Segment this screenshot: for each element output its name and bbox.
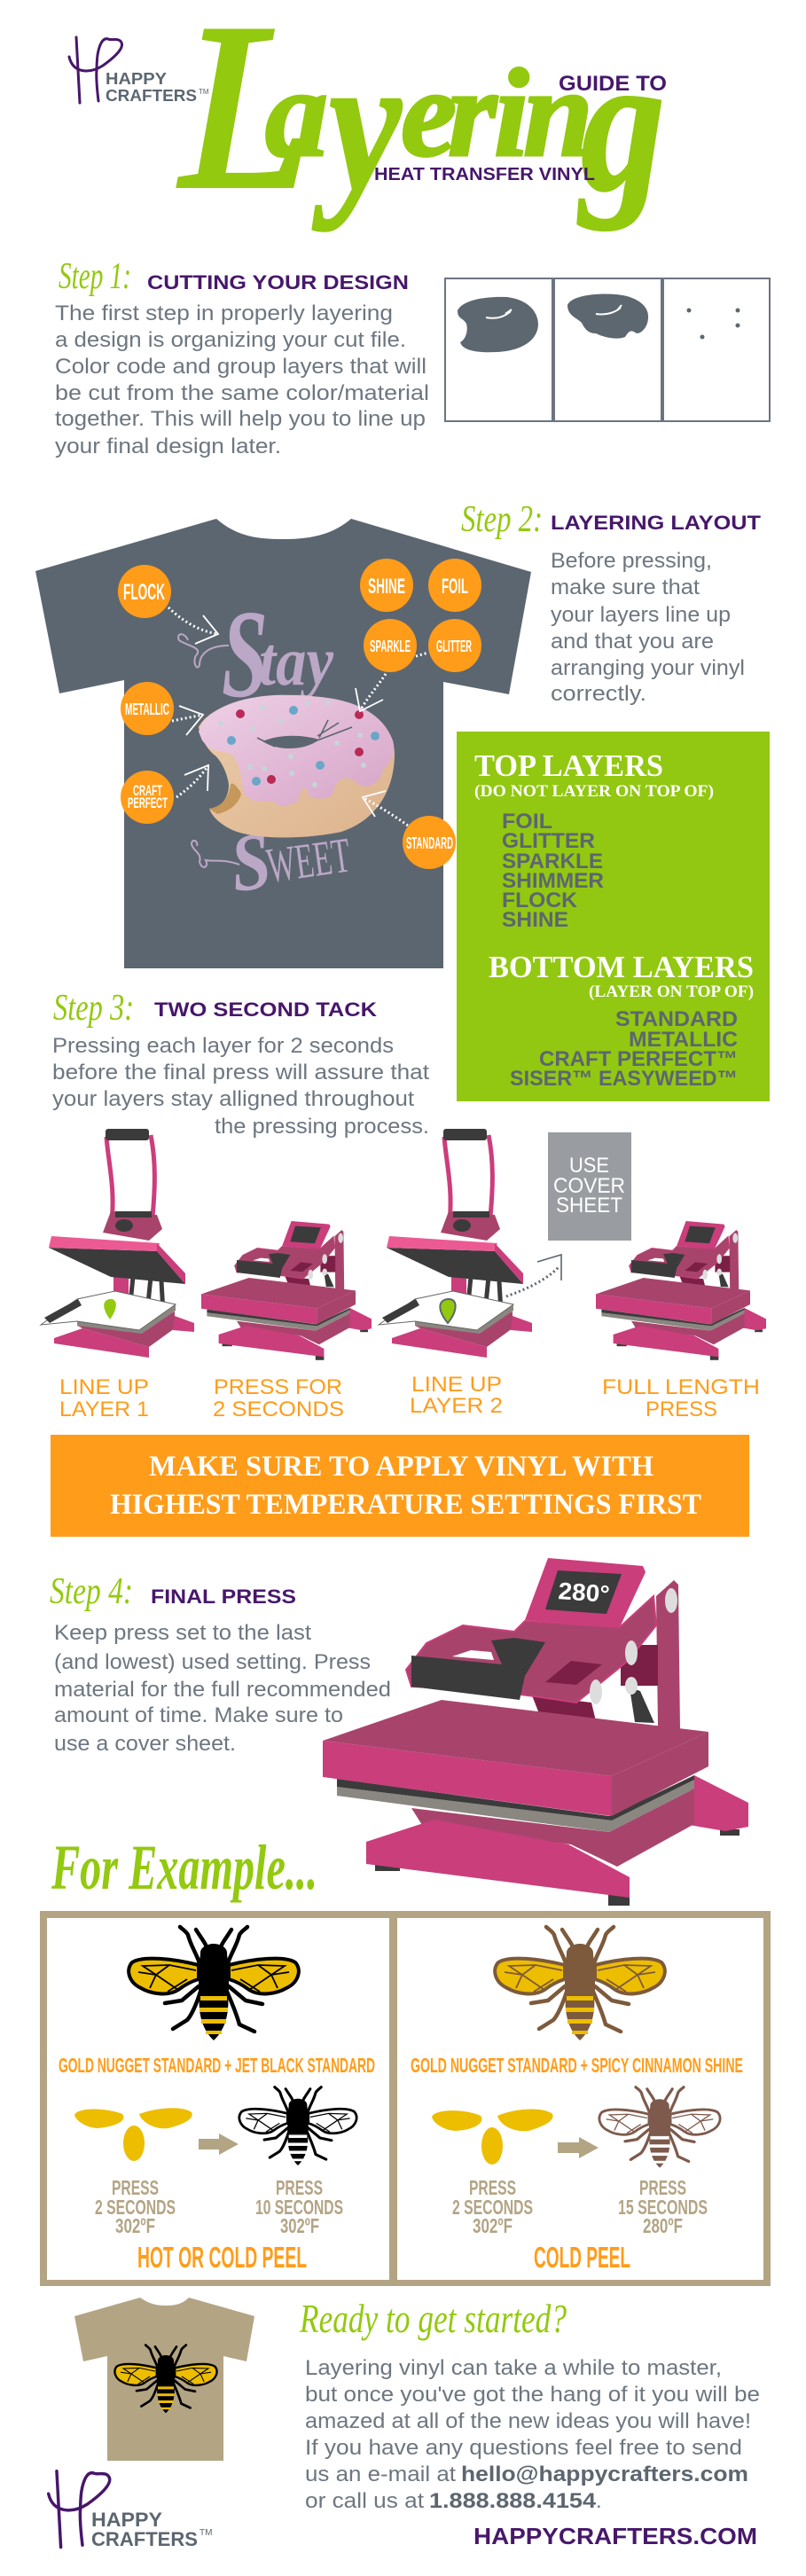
closing text: Layering vinyl can take a while to master, xyxy=(305,2356,722,2380)
callout: sparkle: SPARKLE xyxy=(370,638,411,655)
step 4 text xyxy=(54,1621,391,1756)
arrow xyxy=(199,2134,239,2155)
panel: top and bottom layers xyxy=(457,732,770,1101)
bottom layers list xyxy=(510,1007,738,1091)
large heat press xyxy=(323,1558,748,1906)
title: y xyxy=(312,15,403,231)
callout: use cover sheet: SHEET xyxy=(556,1194,622,1218)
callout: use cover sheet: USE xyxy=(569,1154,609,1178)
press settings: 10 SECONDS xyxy=(255,2196,343,2219)
press settings: PRESS xyxy=(112,2176,159,2199)
press settings: PRESS xyxy=(469,2176,516,2199)
title: a xyxy=(265,43,328,183)
press labels: 2 SECONDS xyxy=(213,1398,344,1421)
press settings xyxy=(95,2176,343,2237)
callout: use cover sheet: COVER xyxy=(553,1174,625,1198)
top layers list xyxy=(502,810,604,932)
heading: ready to get started: Ready to get started? xyxy=(299,2296,567,2341)
callout: craft perfect: CRAFT xyxy=(133,782,162,799)
stay sweet lettering: S xyxy=(222,583,268,724)
callout: standard: STANDARD xyxy=(406,834,453,852)
step 4 heading xyxy=(50,1571,296,1612)
top layers list: FLOCK xyxy=(502,889,578,912)
closing text: If you have any questions feel free to send xyxy=(305,2436,742,2460)
panel: examples frame xyxy=(40,1911,771,2286)
top layers list: GLITTER xyxy=(502,829,595,853)
example left xyxy=(59,1927,375,2274)
logo: Happy Crafters footer: TM xyxy=(200,2528,212,2538)
closing text: but once you've got the hang of it you will be xyxy=(305,2383,760,2407)
step 1 heading: CUTTING YOUR DESIGN xyxy=(147,271,409,294)
step 2 heading: LAYERING LAYOUT xyxy=(551,512,762,534)
top layers list: SHINE xyxy=(502,908,568,932)
bottom layers list: SISER™ EASYWEED™ xyxy=(510,1067,738,1091)
press settings: 280ºF xyxy=(643,2214,683,2237)
step 1 text: Color code and group layers that will xyxy=(55,355,426,379)
step 1 text: The first step in properly layering xyxy=(55,301,393,325)
donut xyxy=(199,695,395,837)
title: e xyxy=(401,43,457,183)
press settings: 302ºF xyxy=(280,2214,319,2237)
panel: top and bottom layers: TOP LAYERS xyxy=(474,748,663,783)
large heat press: 280° xyxy=(558,1578,611,1608)
step 2 heading xyxy=(461,499,762,540)
logo: Happy Crafters header: TM xyxy=(199,88,209,96)
press labels: LINE UP xyxy=(59,1375,149,1399)
step 1 text: a design is organizing your cut file. xyxy=(55,328,406,352)
panel: cut file layers xyxy=(445,278,770,421)
callout: use cover sheet xyxy=(548,1132,631,1241)
press labels: LINE UP xyxy=(411,1373,502,1397)
tan t-shirt with bee xyxy=(74,2298,254,2461)
press settings: 15 SECONDS xyxy=(618,2196,708,2219)
icon: gold first layer xyxy=(432,2109,553,2165)
banner: highest temperature first: MAKE SURE TO APPLY VINYL WITH xyxy=(149,1451,653,1483)
callout: craft perfect: PERFECT xyxy=(128,795,168,811)
title: HEAT TRANSFER VINYL xyxy=(374,165,595,184)
closing text: or call us at xyxy=(305,2489,424,2513)
step 4 text: use a cover sheet. xyxy=(54,1732,236,1756)
step 3 text: your layers stay alligned throughout xyxy=(52,1087,414,1111)
press labels: LAYER 1 xyxy=(59,1398,149,1421)
panel: top and bottom layers: (LAYER ON TOP OF) xyxy=(589,983,754,1001)
press labels: PRESS FOR xyxy=(214,1375,342,1399)
arrow xyxy=(558,2137,599,2158)
icon: brown bee xyxy=(495,1927,665,2040)
icon: brown bee outline layer xyxy=(599,2087,720,2168)
step 3 text: the pressing process. xyxy=(215,1115,429,1139)
step 4 heading: Step 4: xyxy=(50,1571,133,1612)
step 2 heading: Step 2: xyxy=(461,499,543,540)
press settings: 2 SECONDS xyxy=(452,2196,533,2219)
callout: glitter xyxy=(416,619,481,672)
title: r xyxy=(448,43,498,183)
arrow: to cover sheet xyxy=(506,1255,561,1296)
step 2 text: Before pressing, xyxy=(551,549,712,573)
callout: flock xyxy=(118,565,218,644)
step 1 text: together. This will help you to line up xyxy=(55,407,426,431)
step 2 text: your layers line up xyxy=(551,603,731,627)
step 2 text: and that you are xyxy=(551,630,714,654)
closing text: . xyxy=(596,2489,602,2513)
title: GUIDE TO xyxy=(559,72,667,96)
stay sweet lettering: tay xyxy=(259,622,333,700)
step 1 heading: Step 1: xyxy=(59,256,131,297)
step 2 text: arranging your vinyl xyxy=(551,656,745,680)
step 2 text: correctly. xyxy=(551,682,646,706)
step 3 heading: Step 3: xyxy=(53,988,134,1029)
heat press 4: closed xyxy=(596,1221,766,1360)
press labels: PRESS xyxy=(646,1398,717,1421)
press settings: 302ºF xyxy=(473,2214,513,2237)
step 2 text xyxy=(551,549,745,706)
press settings: PRESS xyxy=(639,2176,686,2199)
banner: highest temperature first xyxy=(51,1435,749,1537)
step 1 text: your final design later. xyxy=(55,435,281,458)
step 4 text: Keep press set to the last xyxy=(54,1621,311,1645)
step 3 text: before the final press will assure that xyxy=(52,1061,429,1084)
example right xyxy=(411,1927,743,2274)
callout: flock: FLOCK xyxy=(123,580,165,605)
callout: shine: SHINE xyxy=(368,575,405,599)
heat press 3: open, layer 2 xyxy=(379,1129,532,1358)
bottom layers list: CRAFT PERFECT™ xyxy=(539,1047,738,1071)
press labels: LAYER 2 xyxy=(410,1394,503,1418)
icon: black bee xyxy=(129,1927,299,2040)
title: n xyxy=(523,43,593,183)
t-shirt with donut design xyxy=(35,519,531,968)
step 4 text: (and lowest) used setting. Press xyxy=(54,1650,371,1674)
callout: craft perfect xyxy=(121,765,208,824)
logo: Happy Crafters footer xyxy=(49,2471,212,2550)
step 3 text: Pressing each layer for 2 seconds xyxy=(52,1034,394,1058)
callout: foil xyxy=(428,559,481,612)
top layers list: SPARKLE xyxy=(502,850,603,873)
step 1 text: be cut from the same color/material xyxy=(55,381,429,405)
step 4 text: amount of time. Make sure to xyxy=(54,1703,343,1727)
press settings: 302ºF xyxy=(115,2214,155,2237)
logo: Happy Crafters footer: HAPPY xyxy=(91,2509,162,2531)
icon: gold first layer xyxy=(74,2108,192,2161)
step 1 text xyxy=(55,301,429,458)
step 2 text: make sure that xyxy=(551,575,700,599)
callout: foil: FOIL xyxy=(442,575,468,599)
press settings: 2 SECONDS xyxy=(95,2196,176,2219)
closing text xyxy=(305,2356,760,2513)
stay sweet lettering xyxy=(178,583,354,909)
bottom layers list: STANDARD xyxy=(615,1007,738,1031)
example right: COLD PEEL xyxy=(534,2241,630,2274)
title xyxy=(178,0,667,237)
step 3 heading: TWO SECOND TACK xyxy=(154,998,377,1021)
step 3 text xyxy=(52,1034,429,1139)
callout: metallic: METALLIC xyxy=(125,701,169,718)
step 3 heading xyxy=(53,988,377,1029)
icon: bee outline layer xyxy=(239,2087,356,2165)
stay sweet lettering: WEET xyxy=(263,828,354,894)
closing text: hello@happycrafters.com xyxy=(461,2462,748,2486)
step 4 heading: FINAL PRESS xyxy=(151,1586,296,1608)
press labels xyxy=(59,1373,760,1421)
title: i xyxy=(494,43,528,183)
press labels: FULL LENGTH xyxy=(602,1375,760,1399)
callout: standard xyxy=(363,791,456,869)
callout: glitter: GLITTER xyxy=(436,638,472,655)
logo: Happy Crafters header: HAPPY xyxy=(106,70,167,88)
callout: shine xyxy=(360,559,413,612)
heat press 1: open, layer 1 xyxy=(41,1129,194,1358)
press settings: PRESS xyxy=(276,2176,323,2199)
website: HAPPYCRAFTERS.COM xyxy=(473,2523,757,2549)
stay sweet lettering: S xyxy=(226,814,276,909)
heat press 2: closed xyxy=(201,1221,372,1360)
closing text: amazed at all of the new ideas you will have! xyxy=(305,2409,751,2433)
step 4 text: material for the full recommended xyxy=(54,1678,391,1702)
panel: top and bottom layers: BOTTOM LAYERS xyxy=(489,950,754,984)
logo: Happy Crafters footer: CRAFTERS xyxy=(91,2528,198,2550)
logo: Happy Crafters header: CRAFTERS xyxy=(106,87,197,105)
press settings xyxy=(452,2176,708,2237)
top layers list: FOIL xyxy=(502,810,552,834)
bottom layers list: METALLIC xyxy=(629,1028,738,1052)
closing text: 1.888.888.4154 xyxy=(429,2489,597,2513)
top layers list: SHIMMER xyxy=(502,869,604,893)
logo: Happy Crafters header xyxy=(69,37,209,105)
step 1 heading xyxy=(59,256,409,297)
example left: HOT OR COLD PEEL xyxy=(137,2241,307,2274)
banner: highest temperature first: HIGHEST TEMPERATURE SETTINGS FIRST xyxy=(110,1489,701,1521)
title: g xyxy=(577,16,665,231)
callout: sparkle xyxy=(356,619,417,711)
panel: top and bottom layers: (DO NOT LAYER ON TOP OF) xyxy=(474,782,714,801)
heading: for example: For Example... xyxy=(51,1832,317,1903)
callout: metallic xyxy=(121,682,203,735)
closing text: us an e-mail at xyxy=(305,2462,456,2486)
example left: GOLD NUGGET STANDARD + JET BLACK STANDARD xyxy=(59,2054,375,2077)
